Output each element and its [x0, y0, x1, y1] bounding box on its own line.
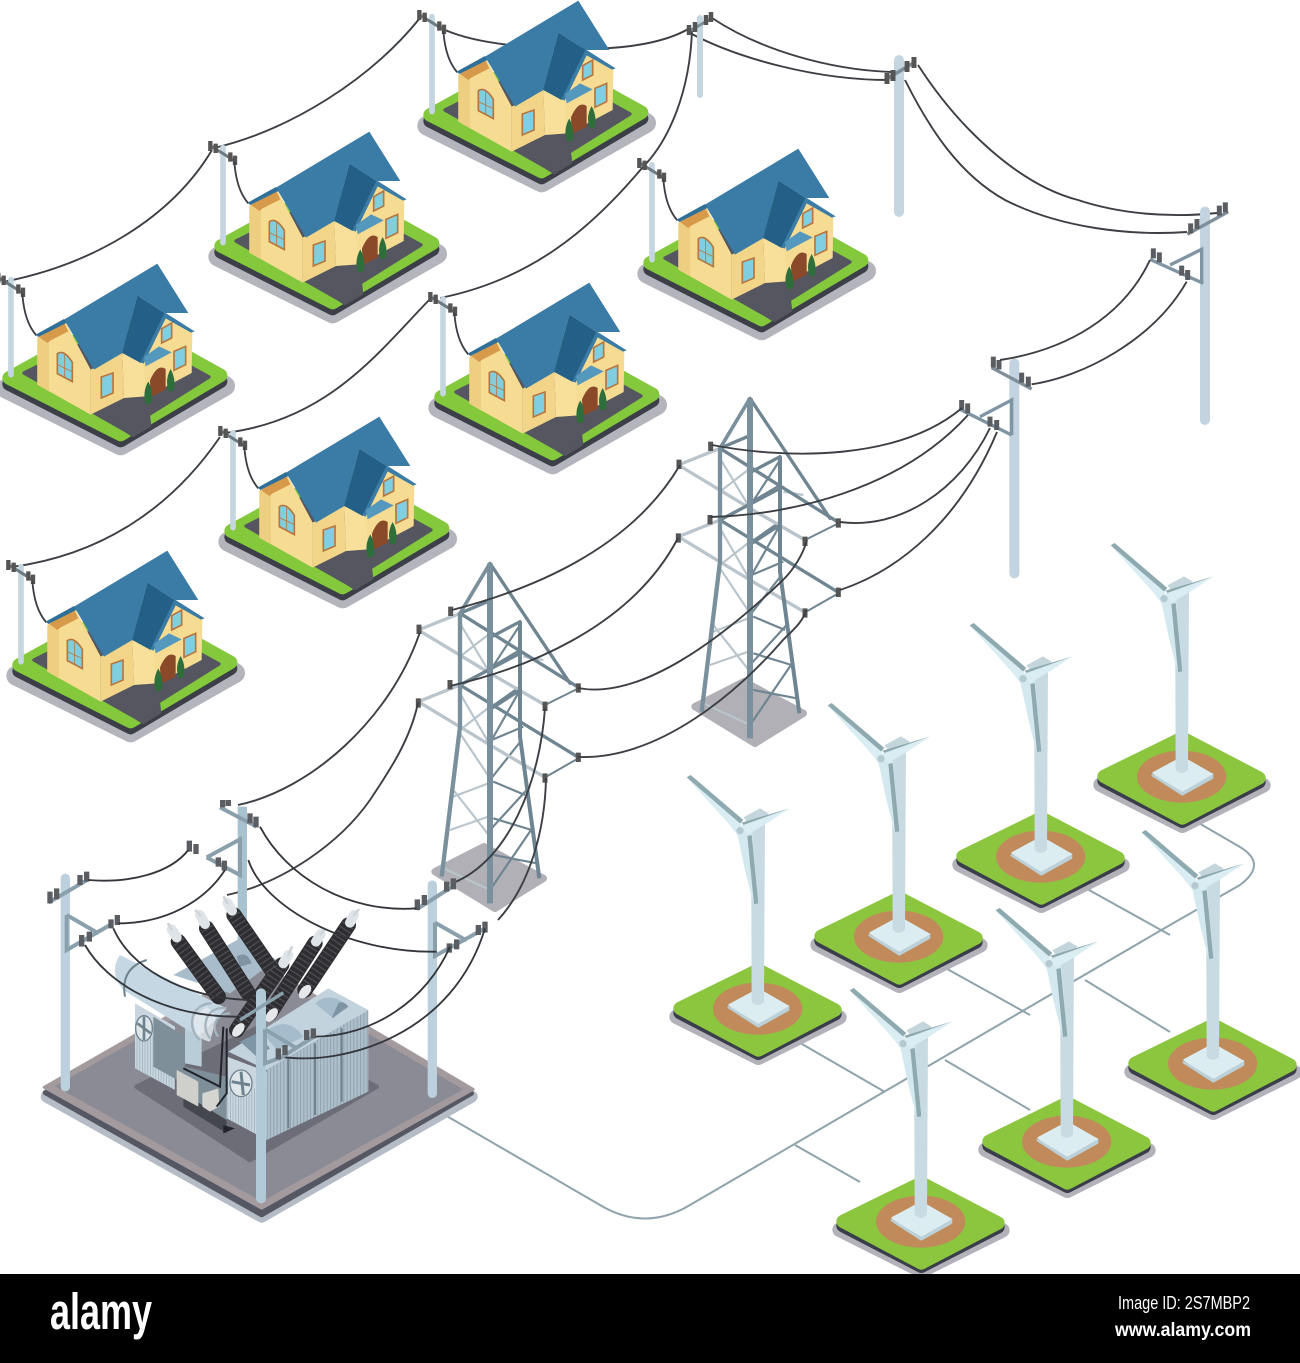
pole middle — [960, 357, 1032, 573]
turbine E — [840, 988, 1002, 1271]
footer logo: alamy — [50, 1283, 152, 1340]
turbine C — [960, 623, 1122, 906]
house 7 — [7, 551, 235, 732]
utility pole top centre — [688, 12, 712, 95]
house 3 — [638, 149, 866, 330]
turbine F — [986, 908, 1148, 1191]
underground cables linking wind turbines to substation — [445, 822, 1254, 1218]
footer bar — [0, 1274, 1300, 1363]
right tank radiators — [267, 1010, 368, 1140]
conservator cylinder — [115, 955, 227, 1037]
left radiator — [135, 1003, 175, 1090]
turbine D — [1101, 543, 1263, 826]
house 2 — [209, 132, 437, 313]
substation — [44, 800, 485, 1217]
footer url: www.alamy.com — [1114, 1320, 1251, 1341]
turbine B — [818, 703, 980, 986]
pole far right — [1150, 202, 1228, 420]
substation wires — [85, 827, 485, 1058]
houses — [0, 1, 866, 732]
pylon 2 — [678, 398, 838, 743]
wires between the two poles — [1000, 260, 1187, 384]
bushings — [168, 897, 358, 1039]
utility pole top right — [885, 57, 915, 212]
house 5 — [429, 283, 657, 464]
house 4 — [0, 264, 225, 445]
turbine G — [1132, 830, 1294, 1113]
wind turbines — [677, 543, 1294, 1271]
back tank — [173, 938, 277, 993]
control boxes — [177, 1070, 198, 1107]
house 6 — [219, 417, 447, 598]
platform — [44, 963, 473, 1217]
footer image id: Image ID: 2S7MBP2 — [1118, 1293, 1250, 1313]
house 1 — [418, 1, 646, 182]
high-voltage wires between pylons and poles — [227, 408, 997, 920]
pylon 1 — [418, 563, 578, 908]
right tank top — [228, 988, 368, 1070]
front pole — [240, 993, 315, 1198]
central frame — [153, 1017, 227, 1127]
turbine A — [677, 775, 839, 1058]
overhead distribution wires to houses — [3, 18, 1217, 567]
transformer — [115, 938, 368, 1140]
large poles and wires at right — [960, 202, 1228, 573]
back poles — [48, 800, 485, 1093]
